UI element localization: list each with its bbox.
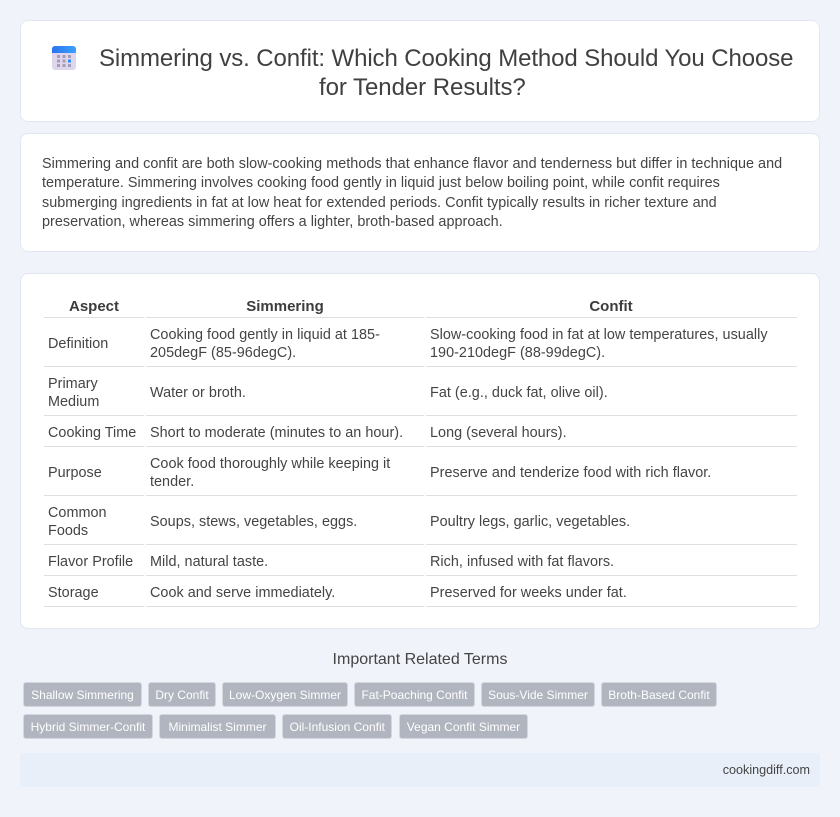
row: common foods: Poultry legs, garlic, vegetables.	[430, 514, 630, 530]
title: Simmering vs. Confit: Which Cooking Method Should You Choose	[99, 45, 793, 72]
row: flavor profile: Mild, natural taste.	[150, 554, 268, 570]
row: cooking time: Short to moderate (minutes to an hour).	[150, 425, 403, 441]
row: storage: Preserved for weeks under fat.	[430, 585, 627, 601]
related terms tags: Dry Confit	[155, 688, 209, 702]
table header: Simmering	[246, 298, 324, 315]
source text: cookingdiff.com	[723, 763, 810, 777]
row: definition: Definition	[48, 336, 108, 352]
row: definition: 205degF (85-96degC).	[150, 345, 296, 361]
related terms tags: Shallow Simmering	[31, 688, 134, 702]
related terms tags: Hybrid Simmer-Confit	[31, 720, 145, 734]
row: common foods	[48, 505, 630, 539]
related terms tags: Broth-Based Confit	[608, 688, 710, 702]
related terms tags: Fat-Poaching Confit	[361, 688, 468, 702]
table header	[69, 298, 633, 315]
related terms heading: Important Related Terms	[333, 651, 507, 668]
intro text panel: submerging ingredients in fat at low heat for extended periods. Confit typically results in richer texture and	[42, 195, 717, 211]
row: definition	[48, 327, 768, 361]
row: storage	[48, 585, 627, 601]
intro text panel: preservation, whereas simmering offers a lighter, broth-based approach.	[42, 214, 503, 230]
row: primary medium: Medium	[48, 394, 99, 410]
row: common foods: Foods	[48, 523, 88, 539]
related terms tags: Minimalist Simmer	[168, 720, 266, 734]
row: common foods: Soups, stews, vegetables, eggs.	[150, 514, 357, 530]
table header: Confit	[589, 298, 633, 315]
row: purpose: Purpose	[48, 465, 102, 481]
table header: Aspect	[69, 298, 119, 315]
row: primary medium: Water or broth.	[150, 385, 246, 401]
related terms tags: Sous-Vide Simmer	[488, 688, 588, 702]
footer bar	[20, 753, 820, 787]
row: flavor profile: Rich, infused with fat flavors.	[430, 554, 614, 570]
related terms tags: Oil-Infusion Confit	[290, 720, 385, 734]
intro text panel: Simmering and confit are both slow-cooking methods that enhance flavor and tenderness but differ in technique and	[42, 156, 782, 172]
title card	[20, 20, 820, 122]
row: definition: Slow-cooking food in fat at low temperatures, usually	[430, 327, 768, 343]
title: for Tender Results?	[319, 74, 526, 101]
comparison table panel	[20, 273, 820, 629]
intro text panel	[20, 133, 820, 252]
intro text panel: temperature. Simmering involves cooking food gently in liquid just below boiling point, while confit requires	[42, 175, 720, 191]
row: primary medium: Primary	[48, 376, 98, 392]
row: primary medium	[48, 376, 608, 410]
related terms tags: Low-Oxygen Simmer	[229, 688, 341, 702]
row: primary medium: Fat (e.g., duck fat, olive oil).	[430, 385, 608, 401]
row: purpose	[48, 456, 711, 490]
row: purpose: tender.	[150, 474, 194, 490]
related terms tags: Vegan Confit Simmer	[407, 720, 520, 734]
related terms tags	[23, 682, 717, 739]
row: storage: Storage	[48, 585, 99, 601]
row: flavor profile: Flavor Profile	[48, 554, 133, 570]
row: storage: Cook and serve immediately.	[150, 585, 335, 601]
icon: calendar	[52, 46, 76, 70]
row: purpose: Preserve and tenderize food with rich flavor.	[430, 465, 711, 481]
row: definition: Cooking food gently in liquid at 185-	[150, 327, 380, 343]
row: cooking time: Cooking Time	[48, 425, 136, 441]
row: definition: 190-210degF (88-99degC).	[430, 345, 605, 361]
title	[99, 45, 793, 101]
row: cooking time	[48, 425, 567, 441]
row: purpose: Cook food thoroughly while keeping it	[150, 456, 390, 472]
row: cooking time: Long (several hours).	[430, 425, 567, 441]
row: flavor profile	[48, 554, 614, 570]
row: common foods: Common	[48, 505, 107, 521]
